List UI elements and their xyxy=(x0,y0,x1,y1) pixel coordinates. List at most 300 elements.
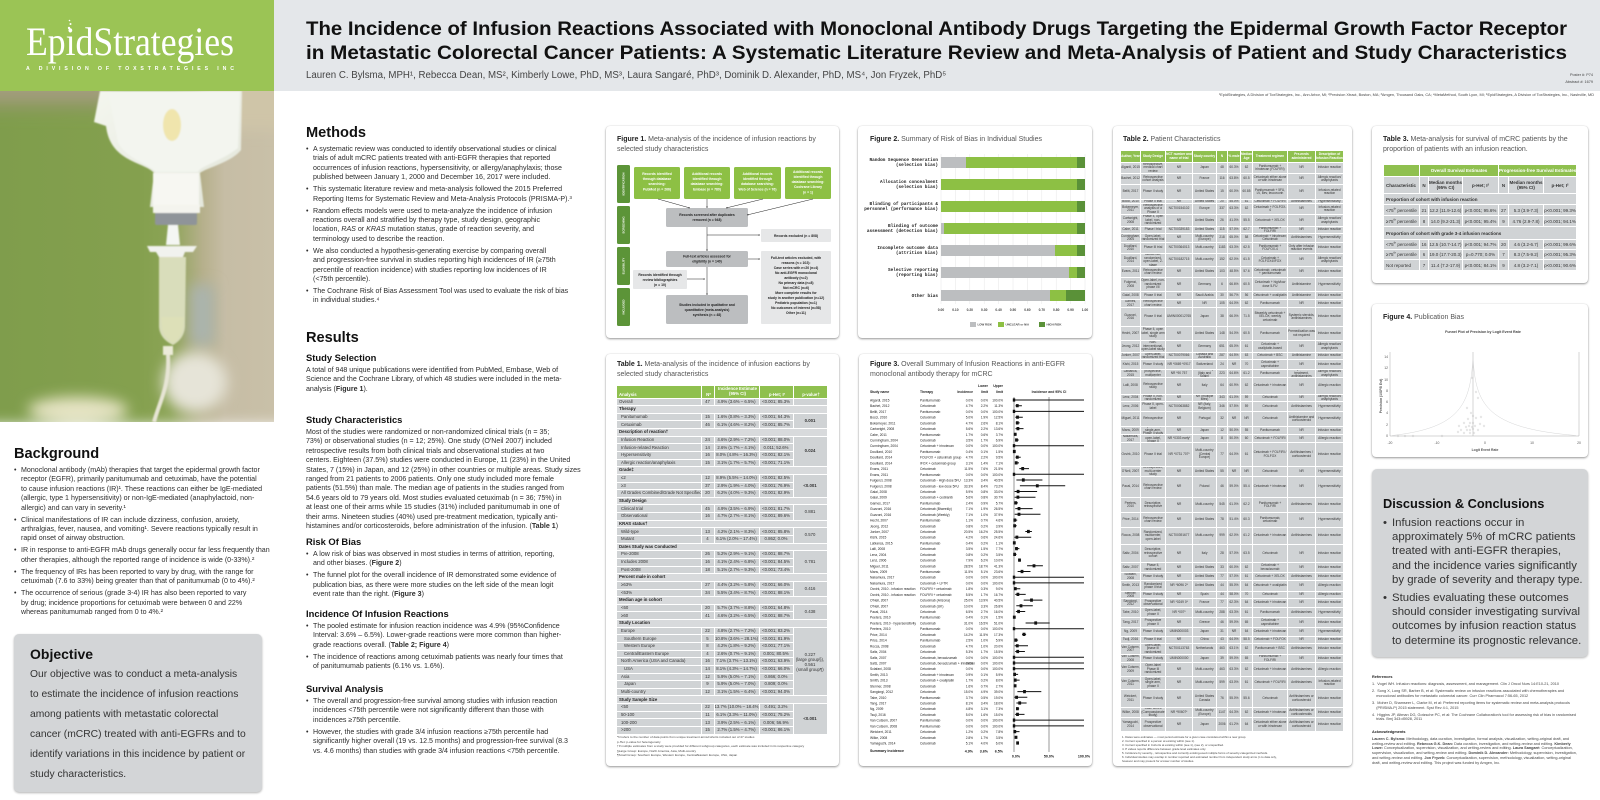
risk of bias: The funnel plot for the overall incidence of IR demonstrated some evidence of xyxy=(313,571,556,579)
table 1 data: <0.001; 75.2% xyxy=(762,712,790,717)
table 3 data: 4.8 (3.2-7.1) xyxy=(1514,262,1538,268)
table 2 data: NCT00063882 xyxy=(1169,404,1189,408)
table 2 data: NCT00339183 xyxy=(1169,227,1189,231)
forest plot: Smith, 2013 xyxy=(870,679,888,683)
table 1 data: (95% CI) xyxy=(729,391,746,396)
survival analysis: incidences ≥75th percentile. xyxy=(313,716,401,724)
table 2 data: 62 xyxy=(1245,383,1248,387)
table 3 data: <75th percentile xyxy=(1386,206,1417,212)
table 1 caption xyxy=(617,360,810,378)
conclusion bullets: treated with anti-EGFR therapies, xyxy=(1392,545,1561,557)
table 1 data: 8 xyxy=(706,643,709,648)
methods bullets: This systematic literature review and meta-analysis followed the 2015 Preferred xyxy=(313,185,562,193)
forest plot: 8.1% xyxy=(996,421,1003,425)
forest plot: Panitumumab xyxy=(920,433,941,437)
forest plot: 0.0% xyxy=(981,656,988,660)
table 2 data: 60.9% xyxy=(1229,383,1239,387)
incidence of infusion reactions: The incidence of reactions among cetuximab patients was nearly four times that xyxy=(313,653,563,661)
table 1 data: 45 xyxy=(705,506,710,511)
forest plot: 1.7% xyxy=(981,593,988,597)
table 1 data: 12 xyxy=(705,689,710,694)
forest plot: Tang, 2017 xyxy=(870,702,886,706)
forest plot: limit xyxy=(996,390,1004,394)
table 2 data: Infusion reaction xyxy=(1318,165,1341,169)
table 1 data: <63% xyxy=(621,590,632,595)
table 2 data: Japan xyxy=(1200,165,1209,169)
table 2 data: Germany xyxy=(1198,282,1211,286)
forest plot: 100.0% xyxy=(992,667,1003,671)
table 2 data: Open-label, phase II xyxy=(1145,608,1161,616)
forest plot: Price, 2014 xyxy=(870,639,887,643)
table 2 data: Fulgenzi, 2008 xyxy=(1124,280,1137,288)
forest plot: Garnes, 2017 xyxy=(870,501,890,505)
acknowledgments: supervision, visualization, and writing-review and editing. Dominik D. Alexander: Methodology, supervision, investigation, xyxy=(1372,751,1577,755)
forest plot: 1.1% xyxy=(966,519,973,523)
table 2 data: Bokemeyer, 2011 xyxy=(1122,204,1139,212)
table 2 data: Panitumumab xyxy=(1260,331,1280,335)
table 1 data: (small group¶) xyxy=(796,667,824,672)
survival analysis: significantly higher overall (19 vs. 12.5 months) and progression-free survival (8.3 xyxy=(313,737,568,745)
risk of bias: publication bias, as there were more studies on the left side of the mean logit xyxy=(313,581,553,589)
title: The Incidence of Infusion Reactions Associated with Monoclonal Antibody Drugs Targeting the Epidermal Growth Factor Receptor xyxy=(306,18,1567,40)
table 2 data: 60.3% xyxy=(1229,165,1239,169)
table 2 data: Panitumumab xyxy=(1260,371,1280,375)
forest plot: Lenz, 2004 xyxy=(870,553,886,557)
table 2 data: Hypersensitivity xyxy=(1318,282,1341,286)
forest plot: 3.4% xyxy=(981,702,988,706)
table 2 data: Hypersensitivity xyxy=(1318,416,1341,420)
table 2 data: United States xyxy=(1195,218,1214,222)
table 2 data: Multi-country xyxy=(1195,533,1214,537)
table 2 data: Antihistamines xyxy=(1291,610,1312,614)
table 2 data: Algardi, 2015 xyxy=(1121,165,1140,169)
forest plot: 0.2% xyxy=(981,730,988,734)
table 2 data: 28 xyxy=(1220,551,1224,555)
table 2 data: Multi-country xyxy=(1195,257,1214,261)
table 1 data: <0.001; 66.0% xyxy=(762,582,790,587)
table 2 data: Phase II study xyxy=(1143,656,1163,660)
table 1 data: 16 xyxy=(705,658,710,663)
forest plot: 3.5% xyxy=(966,547,973,551)
table 2 data: 64 xyxy=(1220,383,1224,387)
conclusion bullets: • xyxy=(1383,592,1387,604)
table 2 data: Cetuximab + high/low dose 5-FU xyxy=(1255,280,1285,288)
forest plot: 9.0% xyxy=(996,587,1003,591)
table 2 data: % male xyxy=(1228,154,1240,158)
forest plot: Cetuximab xyxy=(920,559,936,563)
forest plot: 100.0% xyxy=(992,627,1003,631)
table 2 data: 60.0% xyxy=(1229,565,1239,569)
table 2 data: Infusion reaction xyxy=(1318,353,1341,357)
table 1 data: <0.001; 76.9% xyxy=(762,483,790,488)
table 2 data: NR *0731 707* xyxy=(1168,452,1190,456)
table 2 data: 57.0% xyxy=(1229,227,1239,231)
forest plot: 4.8% xyxy=(966,707,973,711)
objective text: identify variations in this incidence by patient or xyxy=(30,749,245,760)
background bullets: by drug; incidence proportions for cetuximab were between 0 and 22% xyxy=(21,599,242,607)
incidence of infusion reactions: of panitumumab patients (6.1% vs. 1.6%). xyxy=(313,662,444,670)
table 1 data: Percent male in cohort xyxy=(619,574,665,579)
conclusion bullets: and the incidence varies significantly xyxy=(1392,560,1577,572)
table 2 data: Cetuximab + irinotecan xyxy=(1254,383,1286,387)
table 2 data: Infusion reaction xyxy=(1318,301,1341,305)
table 2 data: 65 xyxy=(1245,620,1248,624)
table 2 data: Phase II trial xyxy=(1144,637,1162,641)
panel: figure 2 risk of bias xyxy=(858,126,1092,338)
table 2 footnotes xyxy=(1122,735,1277,763)
table 2 data: Retrospective chart review xyxy=(1143,482,1163,490)
conclusion bullets: outcomes by infusion reaction status xyxy=(1392,620,1576,632)
forest plot: Saltz, 2004 xyxy=(870,650,887,654)
stacked bar chart: Incomplete outcome data xyxy=(877,246,938,251)
table 3 data: ≥75th percentile xyxy=(1386,250,1417,257)
forest plot: Hecht, 2007 xyxy=(870,519,888,523)
table 2 data: NR xyxy=(1177,301,1181,305)
forest plot: Panitumumab xyxy=(920,639,941,643)
background bullets: IR in response to anti-EGFR mAb drugs generally occur far less frequently than xyxy=(21,546,270,554)
table 2 data: 61.2 xyxy=(1243,371,1250,375)
PRISMA flow diagram: searching: xyxy=(648,182,666,186)
table 2 data: 54.0% xyxy=(1229,331,1239,335)
table 2 data: 64 xyxy=(1245,583,1248,587)
forest plot: 50.0% xyxy=(1044,754,1055,758)
table 1 data: 0.561 xyxy=(805,662,815,667)
table 3 data: 12.2 (11.9-12.6) xyxy=(1430,208,1461,212)
table 2 data: Cetuximab + FOLFIRI / FOLFOX xyxy=(1254,450,1286,458)
table 2 data: United States xyxy=(1195,269,1214,273)
table 2 data: NR xyxy=(1299,428,1304,432)
PRISMA flow diagram: Records identified through xyxy=(638,273,682,277)
forest plot: Jeong, 2012 xyxy=(870,524,888,528)
funnel plot: 10 xyxy=(1530,441,1534,445)
table 2 data: NR xyxy=(1299,592,1304,596)
table 2 data: Description of Infusion Reaction xyxy=(1316,152,1343,160)
table 2 data: 24 xyxy=(1220,362,1224,366)
table 1 data: 4.6% (3.2% – 6.5%) xyxy=(717,613,756,618)
table 1 data: 34 xyxy=(705,590,710,595)
forest plot: 7.8% xyxy=(996,730,1003,734)
table 2 data: 65.0% xyxy=(1229,235,1239,239)
forest plot: Nakamura, 2017 xyxy=(870,581,895,585)
table 2 data: 71.5 xyxy=(1243,314,1250,318)
table 2 data: Panitumumab + 5FU, LV, Bev, leucovorin xyxy=(1255,188,1285,195)
table 2 data: Prospective observational xyxy=(1144,720,1162,728)
table 2 data: 46 xyxy=(1220,620,1224,624)
forest plot: Jonker, 2007 xyxy=(870,530,889,534)
table 2 data: Panitumumab, cetuximab xyxy=(1260,516,1280,523)
table 2 data: Van Cutsem, 2007 xyxy=(1121,644,1140,652)
table 1 data: 27 xyxy=(705,582,710,587)
table 2 data: 63.5 xyxy=(1243,551,1250,555)
table 2 data: Cetuximab, cetuximab + panitumumab xyxy=(1254,268,1286,275)
forest plot: Lalli, 2008 xyxy=(870,547,885,551)
forest plot: 33.3% xyxy=(964,484,973,488)
forest plot: Cetuximab (Weekly) xyxy=(920,513,950,517)
table 2 data: Retrospective xyxy=(1143,416,1163,420)
table 1 data: 4.9% (3.5% – 6.9%) xyxy=(717,506,756,511)
table 2 data: 63.3% xyxy=(1229,610,1239,614)
table 2 data: Open-label, non-randomized phase I/II xyxy=(1141,278,1165,289)
background bullets: receptor (EGFR), primarily panitumumab and cetuximab, have the potential xyxy=(21,475,257,483)
forest plot: 3.1% xyxy=(966,461,973,465)
forest plot: Peeters, 2010 xyxy=(870,616,891,620)
table 1 data: 18 xyxy=(705,567,710,572)
forest plot: 3.4% xyxy=(981,478,988,482)
table 2 data: Allergic reaction/ anaphylaxis xyxy=(1318,342,1341,350)
table 2 data: NR xyxy=(1177,235,1181,239)
forest plot: Panitumumab xyxy=(920,473,941,477)
affiliations: ¹EpidStrategies, A Division of ToxStrategies, Inc., Ann Arbor, MI; ²Precision Xtract, Boston, MA; ³Amgen, Thousand Oaks, CA; ⁴MetaMethod, South Lyon, MI; ⁵EpidStrategies, A Division of ToxStrategies, Inc., Nashville, MD xyxy=(1219,93,1594,97)
table 1 data: Therapy xyxy=(619,406,636,411)
table 2 data: NR *90 757 xyxy=(1171,371,1187,375)
forest plot: IFOX + cetuximab group xyxy=(920,461,956,465)
forest plot: 3.7% xyxy=(966,696,973,700)
table 2 data: Antihistamines xyxy=(1291,646,1312,650)
heading: methods: Methods xyxy=(306,125,366,141)
table 2 data: UMIN000000 xyxy=(1170,656,1188,660)
table 2 data: 61 xyxy=(1245,680,1248,684)
forest plot: 0.0% xyxy=(981,667,988,671)
table 2 data: Panitumumab + FOLFIRI xyxy=(1259,500,1281,508)
forest plot: Peeters, 2010 xyxy=(870,627,891,631)
table 2 data: NR xyxy=(1299,629,1304,633)
background bullets: The occurrence of serious (grade 3-4) IR has also been reported to vary xyxy=(21,589,246,597)
table 1 data: <0.001; 64.8% xyxy=(762,605,790,610)
table 2 data: NR xyxy=(1299,269,1304,273)
table 2 data: 62.0% xyxy=(1229,533,1239,537)
table 2 data: NR xyxy=(1177,293,1181,297)
methods bullets: The Cochrane Risk of Bias Assessment Tool was used to evaluate the risk of bias xyxy=(313,287,568,295)
table 2 footnotes: however and may present for a lower number of studies. xyxy=(1122,759,1194,763)
table 3 data: p-Het; I² xyxy=(1472,182,1489,188)
table 2 data: Allergic reaction xyxy=(1318,583,1341,587)
forest plot: 21.5% xyxy=(994,467,1003,471)
table 2 data: Allergic reaction xyxy=(1318,667,1341,671)
table 1 data: 0.491; 3.2% xyxy=(765,704,787,709)
table 2 data: Galal, 2008 xyxy=(1122,293,1139,297)
forest plot: 33.0% xyxy=(994,490,1003,494)
forest plot: 4.2% xyxy=(966,536,973,540)
forest plot: 3.9% xyxy=(996,524,1003,528)
table 2 data: Phase II study xyxy=(1143,592,1163,596)
forest plot: Lenz, 2006 xyxy=(870,559,886,563)
table 1 data: (large group§), xyxy=(796,657,824,662)
table 2 data: Biweekly cetuximab + XELOX; weekly cetuximab xyxy=(1255,311,1285,322)
table 1 data: 46 xyxy=(705,422,710,427)
table 3 data: Proportion of cohort with infusion reaction xyxy=(1386,196,1478,202)
references: monoclonal antibodies for metastatic colorectal cancer. Curr Clin Pharmacol 7:56-65, 2012 xyxy=(1376,694,1528,698)
table 2 data: United States xyxy=(1195,189,1214,193)
table 2 data: Hecht, 2007 xyxy=(1122,331,1139,335)
forest plot: 1.6% xyxy=(966,684,973,688)
forest plot: 1.7% xyxy=(981,438,988,442)
forest plot: 0.8% xyxy=(981,490,988,494)
table 3 data: Median months xyxy=(1510,180,1543,185)
table 2 data: Cetuximab xyxy=(1262,416,1278,420)
forest plot: 0.0% xyxy=(966,656,973,660)
table 2 data: Retrospective chart review xyxy=(1143,516,1163,523)
forest plot: 0.0% xyxy=(966,444,973,448)
forest plot: 4.9% xyxy=(981,690,988,694)
PRISMA flow diagram: Embase (n = 780) xyxy=(693,188,721,192)
forest plot: 0.4% xyxy=(966,616,973,620)
forest plot: 0.4% xyxy=(966,450,973,454)
PRISMA flow diagram: Studies included in qualitative and xyxy=(679,303,735,307)
table 2 data: Phase II study xyxy=(1143,362,1163,366)
table 2 data: N xyxy=(1221,154,1223,158)
logo panel: EpidStrategies xyxy=(26,19,234,64)
table 2 data: Antihistamine and corticosteroid xyxy=(1289,414,1314,422)
forest plot: 5.9% xyxy=(996,673,1003,677)
forest plot: 0.0% xyxy=(966,627,973,631)
table 1 data: 3.9% (2.5% – 6.1%) xyxy=(717,720,756,725)
table 2 data: Prospective phase II xyxy=(1145,618,1161,626)
table 2 data: Cetuximab + FOLFOX xyxy=(1254,637,1286,641)
table 2 data: Retrospective study xyxy=(1143,382,1163,389)
table 2 data: 39 xyxy=(1220,656,1224,660)
study characteristics: at least one of their arms while 15 studies (31%) included panitumumab in one of xyxy=(306,503,559,511)
forest plot: 0.1% xyxy=(981,616,988,620)
title: in Metastatic Colorectal Cancer Patients: A Systematic Literature Review and Meta-Analysis of Patient and Study Characteristics xyxy=(306,42,1567,64)
study characteristics: centers. Eighteen (37.5%) studies were conducted in Europe, 11 (23%) in the United xyxy=(306,456,570,464)
forest plot: Cetuximab - High dose 5FU xyxy=(920,478,961,482)
table 2 data: Netherlands xyxy=(1196,646,1213,650)
forest plot: 5.1% xyxy=(966,742,973,746)
forest plot: Cetuximab xyxy=(920,690,936,694)
forest plot: Cetuximab xyxy=(920,427,936,431)
table 1 data: p-value† xyxy=(802,392,820,397)
table 2 data: Greece xyxy=(1199,620,1210,624)
table 2 data: NR xyxy=(1177,667,1181,671)
forest plot: 0.0% xyxy=(1012,754,1021,758)
forest plot: Cetuximab + LFTR xyxy=(920,581,948,585)
table 2 data: Price, 2014 xyxy=(1122,517,1139,521)
table 3 caption: Table 3. Meta-analysis for survival of mCRC patients by the xyxy=(1383,136,1568,143)
table 2 data: Antihistamines xyxy=(1291,235,1312,239)
table 2 data: Cetuximab + oxaliplatin-based xyxy=(1258,342,1282,350)
table 1 data: Description of reaction† xyxy=(619,429,668,434)
study characteristics: patients (51.5%) than male. The median age of patients in the studies ranged from xyxy=(306,484,564,492)
table 3 data: 4.76 (2.9-7.8) xyxy=(1512,218,1540,224)
forest plot: Cetuximab xyxy=(920,707,936,711)
table 2 footnotes: 5. Incidence by severity-, retrospective and currently existing-used multiple forms of severity-categorized methods. xyxy=(1122,751,1268,755)
forest plot: Cetuximab xyxy=(920,467,936,471)
stacked bar chart: 1.00 xyxy=(1082,308,1088,312)
table 1 data: <0.001 xyxy=(803,716,817,721)
acknowledgments: draft, and writing-review and editing. This project was funded by Amgen, Inc. xyxy=(1372,761,1500,765)
forest plot: 25.0% xyxy=(964,599,973,603)
forest plot: Cetuximab xyxy=(920,416,936,420)
table 1 data: 0.866; 0.0% xyxy=(765,674,787,679)
table 1 data: <60 xyxy=(621,605,628,610)
table 2 data: 58 xyxy=(1245,235,1248,239)
table 2 data: NR *0669 *0917 xyxy=(1167,362,1191,366)
forest plot: 0.1% xyxy=(981,673,988,677)
table 2 data: NR xyxy=(1177,416,1181,420)
forest plot: 0.0% xyxy=(966,719,973,723)
stacked bar chart: LOW RISK xyxy=(978,323,993,327)
table 2 data: United States xyxy=(1195,227,1214,231)
methods bullets: trials of adult mCRC patients treated with anti-EGFR therapies that reported xyxy=(313,154,550,162)
table 1 data: Japan xyxy=(624,681,636,686)
table 2 data: Van Cutsem, 2009 xyxy=(1121,665,1140,672)
table 3 data: p<0.001; 94.7% xyxy=(1465,242,1496,247)
methods bullets xyxy=(306,145,572,304)
table 2 data: Descriptive, retrospective cohort xyxy=(1144,547,1162,558)
heading: results: Results xyxy=(306,330,359,346)
table 2 data: Ng, 2009 xyxy=(1124,629,1137,633)
table 2 data: NR *6096 2* xyxy=(1170,583,1188,587)
forest plot: 9.5% xyxy=(996,456,1003,460)
table 2 data: Japan xyxy=(1200,629,1209,633)
background bullets: Monoclonal antibody (mAb) therapies that target the epidermal growth factor xyxy=(21,466,260,474)
methods bullets: percentile of reaction incidence) with studies reporting low incidences of IR xyxy=(313,266,547,274)
stacked bar chart: 0.80 xyxy=(1053,308,1060,312)
table 2 data: 64 xyxy=(1245,722,1248,726)
table 2 data: NR xyxy=(1177,395,1181,399)
table 2 data: Hypersensitivity xyxy=(1318,469,1341,473)
table 2 data: NR xyxy=(1299,176,1304,180)
forest plot: 0.7% xyxy=(981,519,988,523)
stacked bar chart: 0.40 xyxy=(995,308,1002,312)
table 2 data: Study Design xyxy=(1143,154,1163,158)
table 1 data: Panitumumab xyxy=(621,414,648,419)
PRISMA flow diagram: ELIGIBILITY xyxy=(622,258,626,274)
table 1 data: 16 xyxy=(705,452,710,457)
figure 2 caption: Figure 2. Summary of Risk of Bias in Individual Studies xyxy=(870,136,1042,143)
table 1 data: 4.7% (2.7% – 8.1%) xyxy=(717,513,756,518)
table 2 data xyxy=(1121,151,1343,731)
table 2 data: Phase I trial xyxy=(1145,227,1161,231)
forest plot: 25.5% xyxy=(994,530,1003,534)
table 2 data: 76 xyxy=(1220,696,1224,700)
table 1 data: <0.001; 77.1% xyxy=(762,643,790,648)
table 1 data: >200 xyxy=(621,727,631,732)
table 2 data: 48 xyxy=(1220,165,1224,169)
table 1 data: 3.1% (1.5% – 6.4%) xyxy=(717,689,756,694)
background bullets: rapid onset of airway obstruction. xyxy=(21,534,125,542)
table 2 data: 41.0% xyxy=(1229,218,1239,222)
table 2 data: NR xyxy=(1299,551,1304,555)
forest plot: 0.0% xyxy=(981,627,988,631)
table 2 data: Yamaguchi, 2014 xyxy=(1122,720,1139,728)
objective text: Our objective was to conduct a meta-analysis xyxy=(30,669,237,680)
table 1 data: <0.001; 82.5% xyxy=(762,475,790,480)
table 1 data: Post-2008 xyxy=(621,567,641,572)
forest plot: Panitumumab xyxy=(920,501,941,505)
PRISMA flow diagram: removed (n = 948) xyxy=(693,218,721,222)
table 2 data: Antihistamine xyxy=(1292,293,1311,297)
table 2 data: Cetuximab + irinotecan xyxy=(1254,533,1286,537)
forest plot: 100.0% xyxy=(992,719,1003,723)
table 2 footnotes: 2. Current specified in a person at existing within (see 1). xyxy=(1122,739,1195,743)
table 2 data: Infusion reaction xyxy=(1318,551,1341,555)
forest plot: 1.9% xyxy=(981,416,988,420)
table 1 data: N* xyxy=(706,392,711,397)
forest plot: 1.1% xyxy=(996,541,1003,545)
table 2 data: NR xyxy=(1177,565,1181,569)
table 2 data: 56.7% xyxy=(1229,293,1239,297)
table 1 data: 4.9% (3.6% – 6.5%) xyxy=(717,399,756,404)
table 3 data: Median months xyxy=(1429,180,1462,185)
table 2 data: Italy xyxy=(1202,383,1207,387)
table 2 data: NR xyxy=(1299,484,1304,488)
study selection: A total of 948 unique publications were identified from PubMed, Embase, Web of xyxy=(306,366,558,374)
table 2 caption: Table 2. Patient Characteristics xyxy=(1123,136,1221,143)
panel: figure 1 flowchart xyxy=(606,126,839,338)
forest plot: Panitumumab xyxy=(920,616,941,620)
table 2 data: Bachet, 2012 xyxy=(1121,176,1140,180)
